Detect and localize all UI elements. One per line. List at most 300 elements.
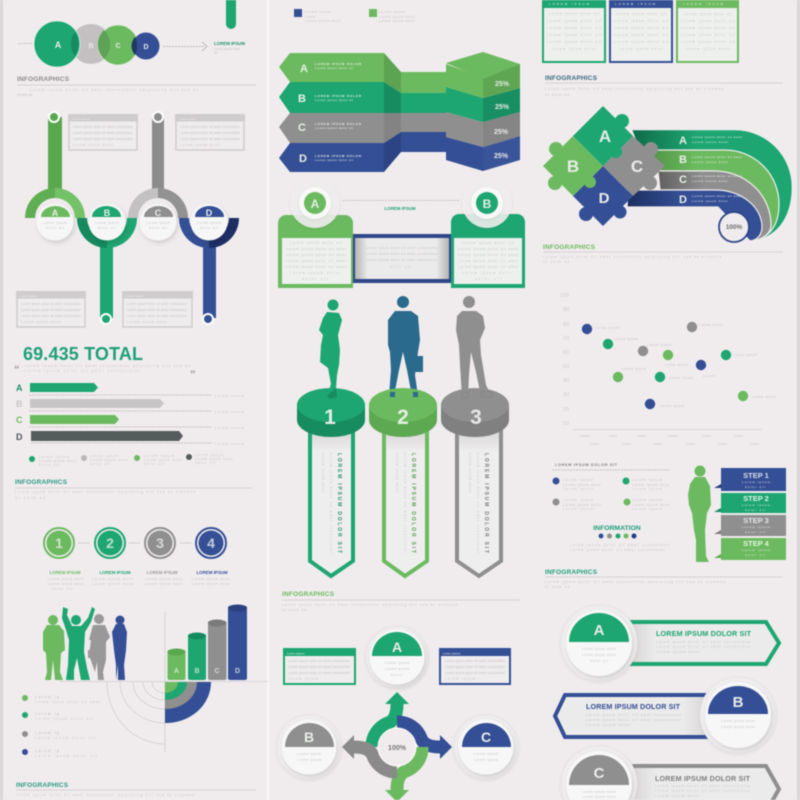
band labels: Lorem ipsum dolor [692,199,728,203]
y axis labels: 60 [563,350,569,356]
step captions: LOREM IPSUM [50,570,81,575]
puzzle A: A [599,127,611,146]
box A: Lorem ipsum dolor sit amet [286,247,346,251]
legend: middle top: Lorem ipsum dolor [379,15,416,19]
circle B: Lorem ipsum dolor [721,719,756,723]
heading: infographics 5: Lorem ipsum dolor sit amet consectetur adipiscing elit sed do eiusmod [545,87,723,91]
node C: dolor sit [149,226,167,230]
arrow [163,42,207,51]
box A: Lorem ipsum dolor sit [290,241,342,245]
arc C [128,188,188,218]
left dash [18,42,32,44]
circle letters: D [143,44,149,51]
bar teal bottom [100,246,113,318]
cylinder B: B [194,668,200,675]
dot labels: Lorem ipsum [647,343,671,347]
pedestal 2: 2 [397,406,409,429]
heading: infographics 6: Lorem ipsum dolor sit amet consectetur adipiscing elit sed do eiusmod [543,255,721,259]
side legend: Lorem ip [35,731,59,735]
label: Lorem ipsum dolor [214,47,241,51]
overlap B/C [98,30,110,59]
ribbon B [279,82,447,113]
legend item green: Lorem ipsum dolor [632,503,671,507]
circle letters: C [115,43,121,50]
banner C: Lorem ipsum dolor sit amet consectetur [655,789,751,793]
text box 2: Lorem ipsum dolor sit amet consectetur [180,125,241,129]
ribbon D: Lorem ipsum dolor sit [315,158,353,162]
box left: Lorem ipsum dolor sit amet consectetur [288,659,351,663]
text box 3: Lorem ipsum [20,294,38,298]
step 2 box: STEP 2 [743,494,769,503]
step captions: Lorem ipsum dolor [48,582,85,586]
box 3: Lorem ipsum dolor sit [684,12,732,16]
band labels: D [679,194,687,206]
circle A [366,626,428,688]
puzzle B [543,136,603,196]
band B [640,150,779,241]
box right [440,649,510,684]
box left: Lorem ipsum dolor sit amet consectetur [288,671,351,675]
information dots [598,534,636,538]
dashed title [343,200,460,211]
ribbon D: D [299,153,307,165]
box 3: Lorem ipsum dolor sit [681,33,735,37]
x axis labels: Lorem [702,434,711,438]
box 1: Lorem ipsum dolor [552,47,597,51]
ribbon C [279,113,447,143]
blue centre box: Lorem ipsum dolor sit amet consectetur [366,246,439,250]
heading: infographics 4 [282,591,520,612]
text box 3: Lorem ipsum dolor sit amet consectetur [21,302,82,306]
step captions: Lorem ipsum dolor [192,577,231,581]
puzzle D [573,166,633,226]
dashed title: LOREM IPSUM [385,206,416,211]
node A [36,204,74,240]
banner B: Lorem ipsum dolor [586,723,631,727]
cube: 25% [495,104,510,111]
information text: Lorem ipsum dolor sit amet consectetur [570,543,671,547]
circle letters [55,40,149,51]
legend title: LOREM IPSUM DOLOR SIT [555,463,618,467]
box 1: Lorem ipsum dolor sit [547,26,601,30]
arrow card 2: LOREM IPSUM DOLOR SIT [410,453,416,553]
label: sit [214,51,217,55]
legend item teal: Lorem ipsum dolor [632,483,671,487]
step captions: Lorem ipsum dolor [92,582,135,586]
text box 4: Lorem ipsum dolor sit amet consectetur [127,314,188,318]
circle A [34,21,80,67]
step 4 box: Lorem ipsum [742,548,770,552]
dot labels: Lorem ipsum [660,404,684,408]
legend: Lorem ipsum dolor [195,457,234,461]
legend item teal [622,478,671,491]
circle D [132,32,160,60]
band labels: Lorem ipsum dolor [692,140,728,144]
text box 3: Lorem ipsum dolor sit amet consectetur [21,314,82,318]
text box 2: Lorem ipsum [179,117,197,121]
person green [43,615,65,680]
step captions: LOREM IPSUM [147,570,178,575]
box 2: Lorem ipsum dolor sit [614,33,668,37]
ribbon D [279,132,447,172]
page edge strip right [797,0,800,800]
legend item blue: Lorem ipsum [563,478,593,482]
step 1: 1 [55,535,63,551]
heading: infographics 3 [16,782,256,797]
x axis labels: Lorem [686,442,695,446]
connectors [78,542,192,544]
arrow left [342,735,397,772]
circle A: Lorem ipsum dolor [582,653,617,657]
step 2 box [714,493,786,513]
centre label [378,728,416,766]
side legend: Lorem ip [35,712,59,716]
circle B [700,677,776,753]
page edge strip left [0,0,3,800]
circle B: B [304,729,314,745]
band C [658,171,771,241]
y axis labels: 10 [563,421,569,427]
box 2 [609,0,673,62]
legend: dolor sit [144,462,164,466]
dot labels: Lorem ipsum [733,353,757,357]
heading: infographics 1: Ut enim ad [17,93,33,97]
person gray [88,614,110,680]
text box 4 [122,291,193,327]
band labels: Lorem ipsum dolor sit amet [692,155,742,159]
box left: Lorem ipsum [288,677,318,681]
box 1: Lorem ipsum dolor sit [549,12,599,16]
dot labels: Lorem ipsum [595,326,619,330]
circle A [561,605,637,681]
arrow card 1 [310,430,353,576]
end dots [49,112,213,324]
step 4 box: STEP 4 [743,539,770,548]
band labels: C [679,174,687,186]
bar A: A [16,383,23,393]
silhouette man with briefcase [388,296,423,396]
legend item blue: Lorem ipsum [563,487,593,491]
top green bar [226,0,236,29]
cylinder D: D [235,668,240,675]
centre label: 100% [388,745,407,752]
text box 1: Lorem ipsum [72,117,90,121]
arrow right [397,722,452,759]
legend item gray: Lorem ipsum [563,507,593,511]
pedestal 3: 3 [470,406,482,429]
box 1: Lorem ipsum dolor sit [547,19,601,23]
box A: Lorem ipsum dolor sit amet [286,253,346,257]
heading: infographics 3: INFOGRAPHICS [16,782,69,789]
banner A: Lorem ipsum dolor sit amet consectetur [656,645,752,649]
circle C: Lorem ipsum dolor [582,790,617,794]
cylinder A [168,648,186,680]
bar B [16,399,244,414]
node A: A [52,208,59,218]
axes [60,612,268,752]
ribbon A [279,53,447,93]
heading: infographics 7: INFOGRAPHICS [545,569,598,576]
arrow card 2: Lorem ipsum dolor [395,453,399,494]
box B: Lorem ipsum dolor sit amet [458,265,518,269]
heading: infographics 6: INFOGRAPHICS [543,244,596,251]
band labels: Lorem ipsum dolor [692,179,728,183]
node A: dolor sit [46,226,64,230]
legend [29,453,234,467]
step 3: 3 [156,535,164,551]
bar A [16,383,244,398]
box right: Lorem ipsum dolor sit amet consectetur [445,659,506,663]
step 2: 2 [106,535,114,551]
heading: infographics 3: Lorem ipsum dolor sit amet consectetur adipiscing elit sed do eiusmod [16,793,194,797]
total title: 69.435 TOTAL [23,344,143,364]
banner C [625,766,779,800]
arrow card 3: Lorem ipsum dolor [468,453,472,494]
quote: ” [190,369,196,381]
cylinder A: A [174,668,179,675]
text box 2: Lorem ipsum dolor sit amet consectetur [180,137,241,141]
box A: dolor sit [302,277,328,281]
dot labels: Lorem ipsum [752,395,776,399]
box 2: Lorem ipsum dolor [619,47,664,51]
legend item blue [552,478,602,491]
step 3 [145,528,175,558]
heading: infographics 7: Lorem ipsum dolor sit amet consectetur adipiscing elit sed do eiusmod [545,580,725,584]
step 3 box [714,515,786,536]
circle A: dolor sit [590,659,608,663]
node D: Lorem ipsum [197,221,221,225]
panel: legend and information [552,463,671,552]
ribbon A: LOREM IPSUM DOLOR [315,62,362,66]
quote [14,364,196,381]
cube: 25% [494,129,509,136]
heading: infographics 1: Lorem ipsum dolor sit amet consectetur adipiscing elit sed do [30,88,198,92]
arrow card 1: Lorem ipsum dolor sit amet consectetur [329,453,333,554]
panel: person with steps [688,466,786,562]
box right: Lorem ipsum dolor sit amet consectetur [445,665,506,669]
legend item gray [552,498,602,511]
step 4 box: dolor sit [745,553,765,557]
box left: Lorem ipsum dolor sit amet consectetur [288,665,351,669]
ribbon B: LOREM IPSUM DOLOR [315,94,362,98]
band labels: Lorem ipsum dolor [692,160,728,164]
legend: Lorem ipsum [90,454,118,458]
step 4: 4 [207,535,215,551]
band labels [679,135,742,206]
box 1: LOREM IPSUM [549,2,590,6]
bar blue bottom [203,246,216,318]
legend item teal: Lorem ipsum [632,478,662,482]
blue centre box: dolor sit [390,265,410,269]
legend: middle top: Lorem [305,15,315,19]
box 1: Lorem ipsum dolor sit [547,40,601,44]
x axis labels: Lorem [668,434,677,438]
node D: dolor sit [200,226,218,230]
puzzle C: C [631,157,643,176]
panel: timeline [16,112,245,327]
heading: infographics 5: INFOGRAPHICS [545,75,598,82]
circle C: C [594,765,605,782]
100% badge [719,212,749,242]
bar B: B [16,399,23,409]
panel: A/B comparison [278,178,525,288]
node B: dolor sit [98,226,116,230]
circle A: Lorem ipsum dolor [582,647,617,651]
node D: D [206,208,213,218]
legend: Lorem ipsum dolor [144,458,183,462]
banner B: Lorem ipsum dolor sit amet consectetur [586,718,682,722]
box A: Lorem ipsum dolor [290,271,341,275]
y axis labels: 100 [560,293,569,299]
bar green top [48,117,62,192]
box 2: Lorem ipsum dolor sit [616,12,666,16]
step 3 box: STEP 3 [743,516,769,525]
step 4 box [714,538,786,560]
legend: middle top: Lorem ipsum dolor [379,19,416,23]
x axis labels: Lorem [637,434,646,438]
dot labels: Lorem ipsum [614,337,638,341]
node C [140,204,176,240]
person blue [112,616,127,680]
box 3: Lorem ipsum dolor sit [681,19,735,23]
banner A [625,622,779,664]
feet overlays [327,388,492,399]
step 2 [95,528,125,558]
quote: Lorem ipsum dolor sit amet consectetur [25,369,141,373]
ribbon C: C [298,122,306,134]
heading: infographics 5 [545,75,783,97]
circle C [98,25,138,65]
information title: INFORMATION [593,525,641,532]
banner C: Lorem ipsum dolor [655,794,700,798]
box left [284,649,355,684]
silhouette woman [319,300,342,396]
quarter guide arcs [107,682,165,744]
arrow card 1: LOREM IPSUM DOLOR SIT [336,453,342,553]
legend item green: Lorem ipsum [632,507,662,511]
legend item green [624,498,671,511]
x axis [573,428,762,430]
bar B: Lorem ipsum [215,410,244,414]
band labels: Lorem ipsum dolor sit amet [692,174,742,178]
arrow card 1: Lorem ipsum dolor [321,453,325,494]
circle C: Lorem ipsum dolor [582,795,617,799]
circle A: Lorem ipsum [385,667,409,671]
banner B: LOREM IPSUM DOLOR SIT [586,702,681,711]
text box 3: Lorem ipsum dolor sit amet consectetur [21,308,82,312]
legend: middle top [294,9,416,23]
node D [190,204,228,240]
x axis labels: Lorem [718,442,727,446]
dot labels: Lorem ipsum [622,367,646,371]
box 2: Lorem ipsum dolor sit [614,26,668,30]
band labels: Lorem ipsum dolor sit amet [692,135,742,139]
box left: Lorem ipsum [287,652,305,656]
text box 3 [16,291,86,327]
box B: B [483,197,492,211]
band D [627,190,762,241]
box B: Lorem ipsum dolor sit [462,241,514,245]
text box 1 [68,114,138,150]
person teal arms up [62,607,95,680]
heading: infographics 6 [543,244,783,264]
panel: banners [555,605,779,800]
information text [570,543,671,552]
text box 3: Lorem ipsum dolor [21,320,62,324]
node C: C [155,208,162,218]
step captions: Lorem ipsum dolor [145,577,184,581]
heading: infographics 4: Ut enim ad [282,608,306,612]
node B: Lorem ipsum [95,221,119,225]
100% badge: 100% [726,224,743,231]
box 3 [677,0,739,62]
circle B: Lorem ipsum [297,758,321,762]
heading: infographics 2 [15,479,253,500]
heading: infographics 5: Ut enim ad [545,93,569,97]
box A: Lorem ipsum dolor sit amet [286,265,346,269]
step 3 box: Lorem ipsum [742,525,770,529]
x axis labels: Lorem [622,442,631,446]
circle C: Lorem ipsum [474,752,498,756]
legend: middle top: Lorem ipsum dolor [305,19,342,23]
box right: Lorem ipsum dolor sit amet consectetur [445,671,506,675]
pedestal 1 [297,388,365,437]
box A: A [311,197,320,211]
silhouette person [688,466,711,562]
band labels: A [679,135,687,147]
circle A: dolor [391,673,404,677]
bar A: Lorem ipsum [215,394,244,398]
text box 4: Lorem ipsum dolor sit amet consectetur [127,308,188,312]
arrow card 2 [384,430,427,576]
circle B: B [733,694,744,711]
cube: 25% [494,153,509,160]
circle letters: A [55,40,62,50]
overlap C/D [132,37,137,55]
box A [278,178,353,288]
ribbon B: B [298,93,306,105]
circle C: Lorem ipsum [474,758,498,762]
panel: numbered steps [44,528,231,591]
banner A: Lorem ipsum dolor sit amet consectetur [656,640,752,644]
arrow card 3: Lorem ipsum dolor sit amet consectetur [476,453,480,554]
bar D [16,431,244,446]
legend item gray: Lorem ipsum [563,498,593,502]
legend: Lorem ipsum [144,454,174,458]
box B: Lorem ipsum dolor sit amet [458,253,518,257]
bar D: Lorem ipsum [215,442,244,446]
box B: Lorem ipsum dolor sit amet [458,247,518,251]
legend: middle top: Lorem ipsum [379,10,405,14]
blue centre box [353,236,451,281]
cylinder C: C [214,668,220,675]
text box 4: Lorem ipsum [126,294,144,298]
cylinder D [228,604,247,680]
circle B: Lorem ipsum dolor [721,725,756,729]
step 4 [196,528,226,558]
step 1 box: STEP 1 [743,471,769,480]
side legend: Lorem ipsum dolor sit amet [35,700,100,704]
y axis labels: 20 [563,407,569,413]
heading: infographics 2: Ut enim ad [15,496,45,500]
band labels: B [679,154,687,166]
node A: Lorem ipsum [43,221,67,225]
heading: infographics 7 [545,569,783,589]
dot labels: Lorem [703,374,715,378]
step 2 box: dolor sit [745,508,765,512]
banner C: Lorem ipsum dolor sit amet consectetur [655,784,751,788]
circle C [454,715,518,779]
